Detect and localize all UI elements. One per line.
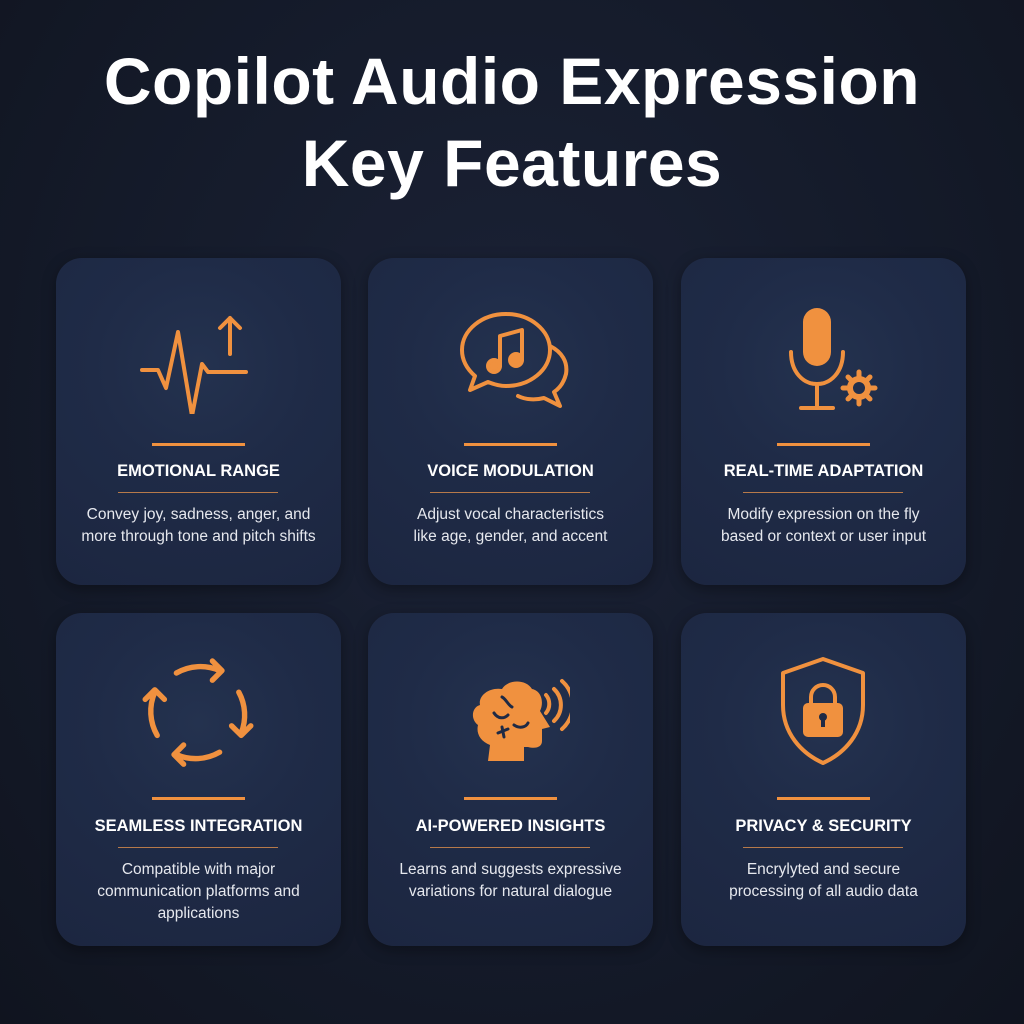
heading: AI-POWERED INSIGHTS	[416, 817, 605, 835]
icon: speech bubbles with note	[460, 312, 568, 408]
description: based or context or user input	[721, 528, 926, 545]
icon: shield with lock	[781, 657, 865, 765]
title	[104, 44, 920, 200]
description: Adjust vocal characteristics	[417, 506, 604, 523]
description: processing of all audio data	[729, 883, 918, 900]
description: more through tone and pitch shifts	[81, 528, 316, 545]
icon: pulse with arrow	[140, 316, 248, 414]
heading: PRIVACY & SECURITY	[735, 817, 912, 835]
description	[81, 506, 316, 545]
panel: seamless integration	[56, 613, 341, 946]
description: Modify expression on the fly	[727, 506, 920, 523]
description	[97, 861, 300, 922]
panel: voice modulation	[368, 258, 653, 585]
panel: AI-powered insights	[368, 613, 653, 946]
icon: head with brain and sound waves	[472, 678, 570, 761]
description	[399, 861, 622, 900]
description	[729, 861, 918, 900]
description: variations for natural dialogue	[409, 883, 612, 900]
title: Copilot Audio Expression	[104, 44, 920, 118]
panel: real-time adaptation	[681, 258, 966, 585]
description: applications	[158, 905, 239, 922]
description: Learns and suggests expressive	[399, 861, 622, 878]
heading: REAL-TIME ADAPTATION	[724, 462, 923, 480]
description: Compatible with major	[122, 861, 275, 878]
description: like age, gender, and accent	[414, 528, 607, 545]
description: Encrylyted and secure	[747, 861, 900, 878]
heading: SEAMLESS INTEGRATION	[95, 817, 302, 835]
icon: cycle arrows	[142, 658, 254, 767]
description	[721, 506, 926, 545]
heading: EMOTIONAL RANGE	[117, 462, 280, 480]
title: Key Features	[302, 126, 722, 200]
icon: microphone with gear	[789, 308, 878, 410]
heading: VOICE MODULATION	[427, 462, 594, 480]
description	[414, 506, 608, 545]
panel: emotional range	[56, 258, 341, 585]
panel: privacy & security	[681, 613, 966, 946]
description: communication platforms and	[97, 883, 300, 900]
description: Convey joy, sadness, anger, and	[87, 506, 310, 523]
